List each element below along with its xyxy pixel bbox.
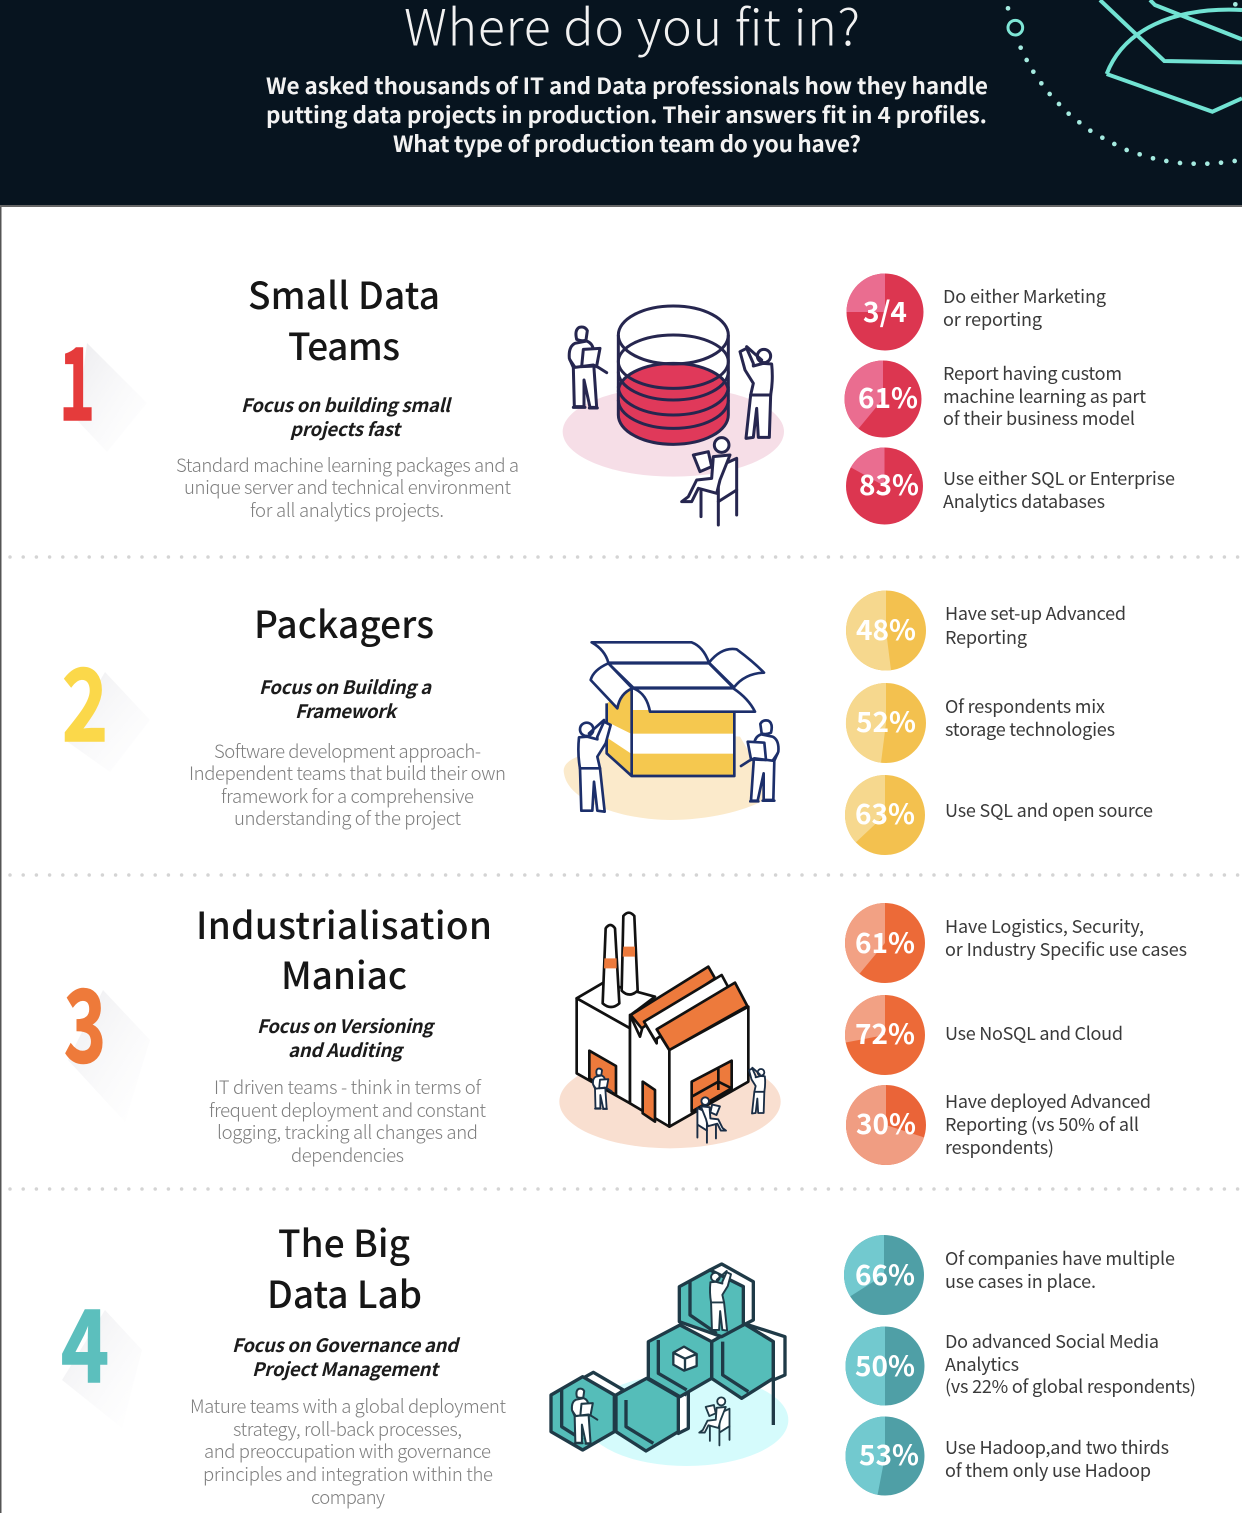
number 1: 1 [59,304,95,449]
stat: 66%: Of companies have multiple [945,1245,1175,1271]
focus line: projects fast [290,416,402,442]
stat: 53%: of them only use Hadoop [945,1457,1151,1483]
heading: Industrialisation [196,896,492,950]
focus line: Framework [295,698,399,724]
stat: 61%: machine learning as part [943,383,1146,409]
illustration: factory with people [559,913,781,1148]
intro text: putting data projects in production. Their answers fit in 4 profiles. [266,98,987,130]
heading [267,1214,422,1319]
intro text: What type of production team do you have? [393,127,861,159]
heading [248,266,440,371]
description: Mature teams with a global deployment [190,1393,506,1419]
stat: 30%: Have deployed Advanced [945,1088,1151,1114]
intro text: We asked thousands of IT and Data professionals how they handle [266,69,988,101]
stat: 83% [846,448,1175,524]
stat: 52%: Of respondents mix [945,693,1105,719]
stat: 66% [844,1235,1175,1315]
stat: 3/4: 3/4 [863,291,907,331]
stat: 53%: Use Hadoop,and two thirds [945,1434,1169,1460]
stat: 61% [844,360,1146,438]
stat: 52%: 52% [856,701,916,741]
stat: 48% [846,590,1126,670]
stat: 61%: 61% [855,922,915,962]
stat: 3/4: or reporting [943,306,1042,332]
stat: 61%: 61% [858,377,918,417]
description: IT driven teams - think in terms of [214,1074,482,1100]
stat: 61% [845,903,1187,983]
header band [0,0,1242,207]
panel: the big data lab [61,1214,1196,1510]
heading: Maniac [281,946,407,1000]
number 4 [61,1266,142,1428]
stat: 52%: storage technologies [945,716,1115,742]
description [189,738,506,831]
description: company [311,1484,385,1510]
description: Standard machine learning packages and a [176,452,519,478]
stat: 30%: 30% [856,1103,916,1143]
number 1 [59,304,147,452]
focus line: Focus on Building a [259,674,432,700]
left edge line [0,207,2,1513]
stat: 72%: Use NoSQL and Cloud [945,1020,1123,1046]
description: for all analytics projects. [250,497,444,523]
focus line: and Auditing [288,1037,405,1063]
focus line: Project Management [252,1356,440,1382]
stat: 48%: 48% [856,609,916,649]
stat: 3/4: Do either Marketing [943,283,1106,309]
description: Software development approach- [214,738,481,764]
panel: small data teams [59,266,1175,525]
stat: 63% [845,775,1153,855]
stat: 3/4 [846,274,1106,350]
stat: 48%: Have set-up Advanced [945,600,1126,626]
stat: 66%: use cases in place. [945,1268,1096,1294]
stat: 61%: or Industry Specific use cases [945,936,1187,962]
heading: Small Data [248,266,440,320]
stat: 50%: (vs 22% of global respondents) [945,1373,1196,1399]
number 2: 2 [62,625,108,770]
panel: industrialisation maniac [64,896,1187,1168]
focus line: Focus on building small [241,392,452,418]
heading: Teams [288,317,400,371]
stat: 50%: Analytics [945,1351,1019,1377]
heading: Packagers [254,595,434,649]
focus line [259,674,432,724]
stat: 63%: 63% [855,793,915,833]
stat: 50% [846,1326,1196,1406]
number 2 [62,625,150,772]
stat: 83%: Analytics databases [943,488,1105,514]
description [176,452,519,523]
description: frequent deployment and constant [209,1097,486,1123]
description [190,1393,506,1510]
stat: 50%: 50% [855,1345,915,1385]
stat: 72%: 72% [855,1013,915,1053]
number 3: 3 [64,946,106,1091]
stat: 52% [846,683,1115,763]
dotted dividers [10,557,1238,1189]
description: Independent teams that build their own [189,760,506,786]
stat: 61%: Have Logistics, Security, [945,913,1144,939]
description: and preoccupation with governance [204,1438,491,1464]
stat: 72% [845,995,1123,1075]
stat: 30%: Reporting (vs 50% of all [945,1111,1139,1137]
illustration: open box with people [564,642,778,820]
panel: packagers [62,590,1153,855]
number 3 [64,946,150,1122]
description: framework for a comprehensive [221,783,474,809]
description: understanding of the project [234,805,461,831]
focus line: Focus on Versioning [257,1013,436,1039]
heading: The Big [278,1214,410,1268]
focus line [232,1332,461,1382]
description: logging, tracking all changes and [217,1119,478,1145]
focus line [241,392,452,442]
heading: Data Lab [267,1265,422,1319]
stat: 61%: of their business model [943,405,1135,431]
focus line: Focus on Governance and [232,1332,461,1358]
heading [196,896,492,1000]
stat: 30%: respondents) [945,1134,1054,1160]
stat: 48%: Reporting [945,624,1027,650]
stat: 63%: Use SQL and open source [945,797,1153,823]
description: unique server and technical environment [184,474,511,500]
stat: 66%: 66% [855,1254,915,1294]
stat: 83%: Use either SQL or Enterprise [943,465,1175,491]
focus line [257,1013,436,1063]
stat: 83%: 83% [859,464,919,504]
description [209,1074,486,1168]
description: strategy, roll-back processes, [233,1416,462,1442]
illustration: database cylinder with people [563,306,784,525]
stat: 30% [846,1085,1151,1165]
stat: 50%: Do advanced Social Media [945,1328,1159,1354]
number 4: 4 [61,1266,109,1411]
description: dependencies [291,1142,404,1168]
stat: 61%: Report having custom [943,360,1122,386]
stat: 53%: 53% [859,1434,919,1474]
description: principles and integration within the [203,1461,493,1487]
illustration: hexagon lab with people [551,1264,788,1466]
header decoration: dotted arc and teal outlines [1006,0,1242,166]
stat: 53% [846,1416,1169,1496]
intro text [266,69,988,159]
